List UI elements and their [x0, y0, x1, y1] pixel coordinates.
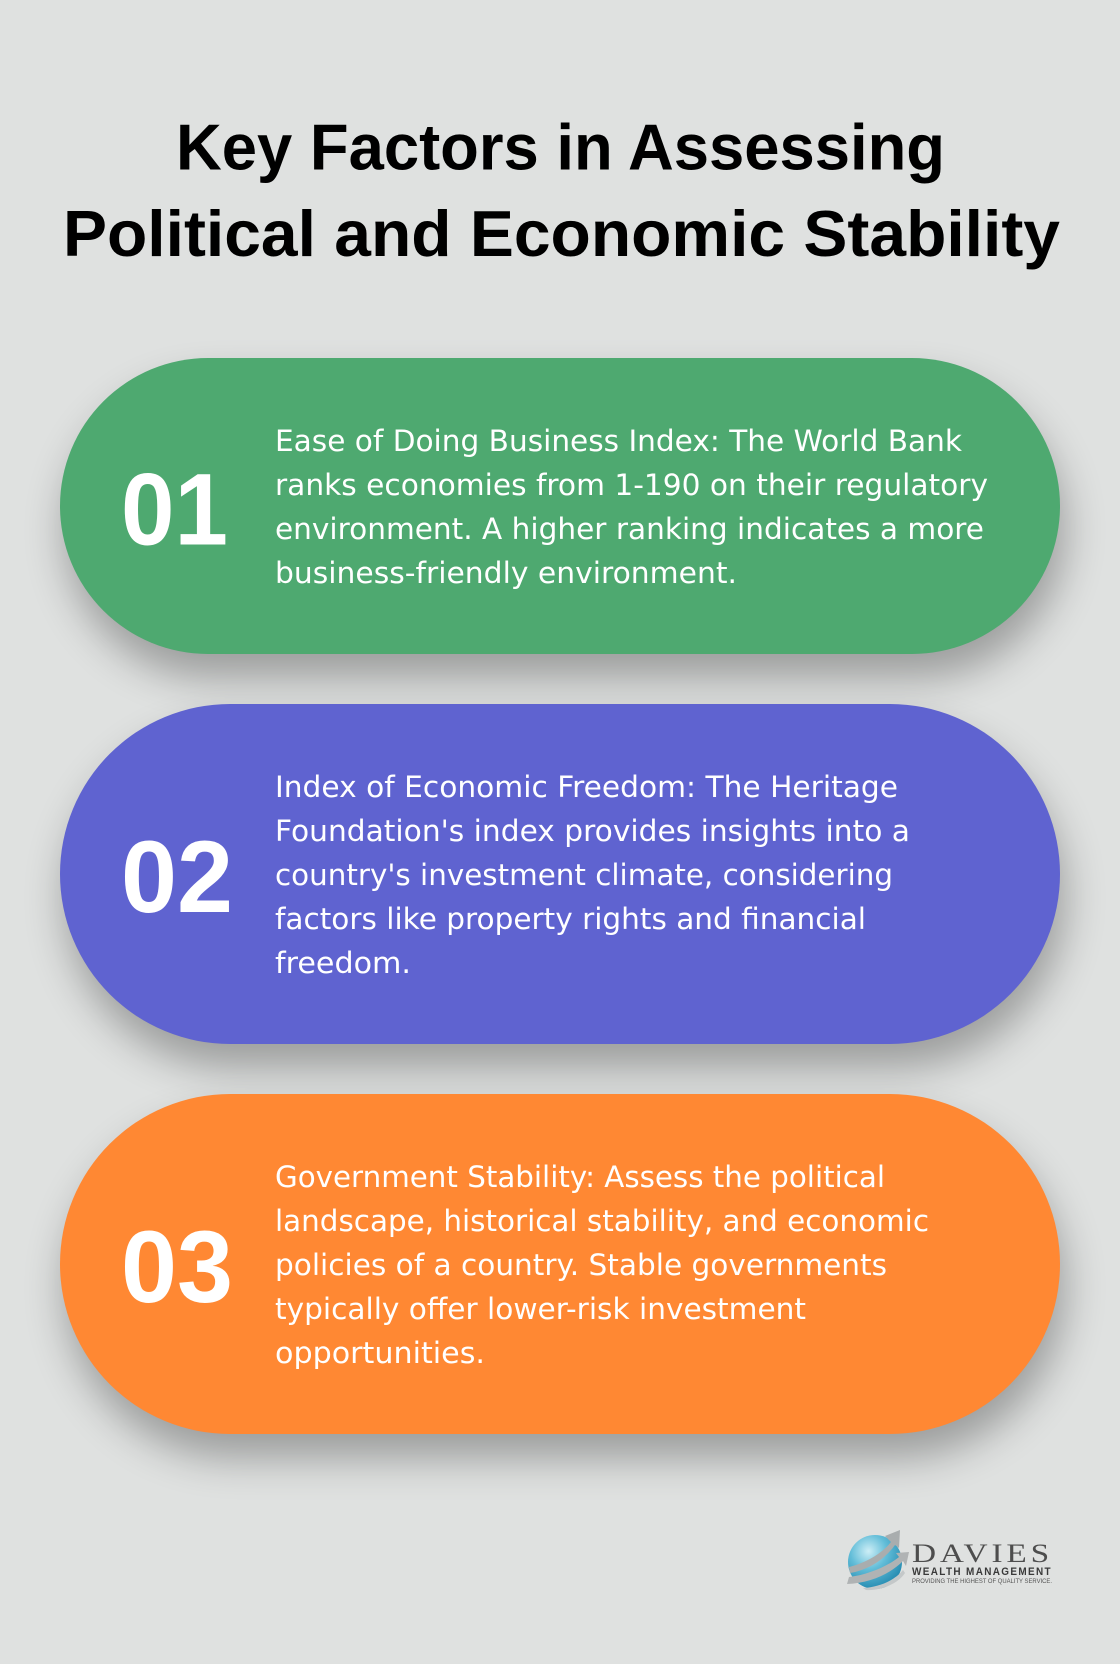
text: Ease of Doing Business Index: [275, 424, 988, 590]
text: Index of Economic Freedom: [275, 770, 910, 980]
text: Index of Economic Freedom: Foundation's index provides insights into a: [275, 814, 910, 848]
text: Ease of Doing Business Index: business-friendly environment.: [275, 556, 737, 590]
panel: 02 Index of Economic Freedom: [60, 704, 1060, 1044]
wordmark: PROVIDING THE HIGHEST OF QUALITY SERVICE.: [912, 1579, 1052, 1585]
panel: 03 Government Stability: [60, 1094, 1060, 1434]
wordmark: DAVIES: [912, 1539, 1053, 1568]
icon: globe with arrows: [847, 1530, 909, 1590]
title: Key Factors in Assessing: [176, 110, 945, 184]
number 02: 02: [121, 820, 233, 934]
number 01: 01: [121, 452, 228, 566]
wordmark: WEALTH MANAGEMENT: [912, 1566, 1052, 1578]
text: Ease of Doing Business Index: Ease of Doing Business Index: The World Bank: [275, 424, 962, 458]
text: Government Stability: [275, 1160, 929, 1370]
logo: Davies Wealth Management: [847, 1530, 1053, 1590]
panel: 01 Ease of Doing Business Index: [60, 358, 1060, 654]
text: Ease of Doing Business Index: ranks economies from 1-190 on their regulatory: [275, 468, 988, 502]
text: Index of Economic Freedom: freedom.: [275, 946, 411, 980]
text: Government Stability: opportunities.: [275, 1336, 485, 1370]
title: [63, 110, 1060, 270]
text: Index of Economic Freedom: country's investment climate, considering: [275, 858, 893, 892]
text: Government Stability: landscape, historical stability, and economic: [275, 1204, 929, 1238]
wordmark: [912, 1539, 1053, 1585]
number 03: 03: [121, 1210, 233, 1324]
text: Government Stability: typically offer lower-risk investment: [275, 1292, 806, 1326]
text: Ease of Doing Business Index: environment. A higher ranking indicates a more: [275, 512, 984, 546]
text: Index of Economic Freedom: Index of Economic Freedom: The Heritage: [275, 770, 898, 804]
text: Government Stability: policies of a country. Stable governments: [275, 1248, 887, 1282]
text: Government Stability: Government Stability: Assess the political: [275, 1160, 885, 1194]
title: Political and Economic Stability: [63, 197, 1060, 270]
text: Index of Economic Freedom: factors like property rights and financial: [275, 902, 866, 936]
